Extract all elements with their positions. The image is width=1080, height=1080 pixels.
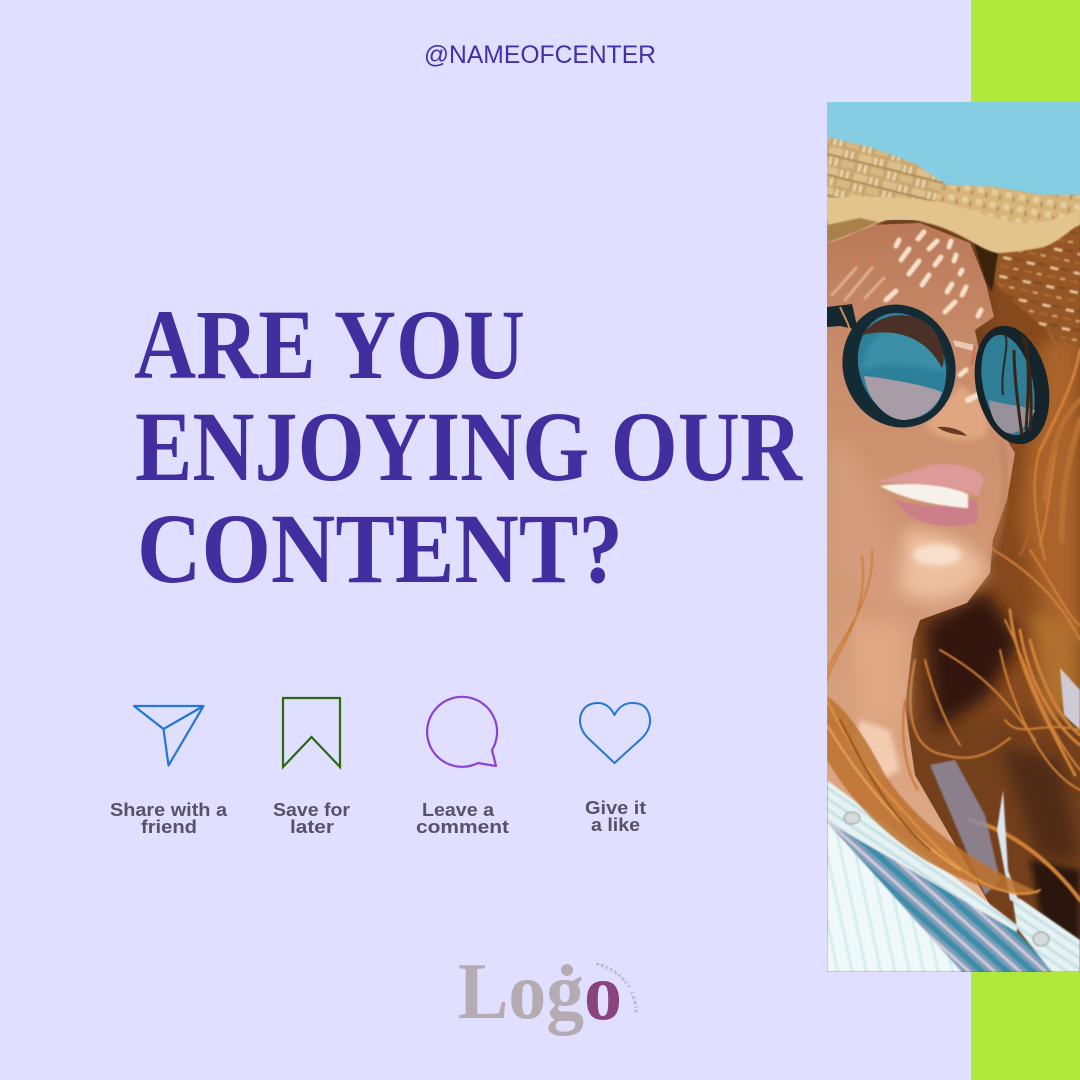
- sunglasses: [827, 304, 1050, 444]
- label: save for later: [273, 800, 350, 837]
- hair mass: [827, 220, 1080, 972]
- icon: comment bubble: [427, 697, 497, 767]
- headline: CONTENT?: [137, 493, 623, 604]
- hair strands: [910, 290, 1080, 900]
- label: give it a like: Give it: [585, 798, 646, 818]
- label: save for later: Save for: [273, 800, 350, 820]
- label: leave a comment: Leave a: [422, 800, 495, 820]
- sky: [827, 102, 1080, 222]
- bottom green accent block: [971, 972, 1080, 1080]
- icon: save bookmark: [283, 698, 340, 767]
- headline: ENJOYING OUR: [135, 391, 804, 502]
- straw hat: [827, 137, 1080, 345]
- label: give it a like: a like: [591, 815, 640, 835]
- striped shirt: [827, 760, 1080, 972]
- headline: ARE YOU: [134, 289, 525, 400]
- label: save for later: later: [290, 817, 334, 837]
- loose strands over neck and shirt: [827, 550, 1040, 894]
- label: share with a friend: Share with a: [110, 800, 228, 820]
- label: share with a friend: friend: [141, 817, 197, 837]
- dappled sunlight on forehead: [832, 232, 981, 400]
- logo: Log: [458, 948, 584, 1036]
- label: share with a friend: [110, 800, 228, 837]
- headline: [134, 289, 804, 604]
- label: leave a comment: comment: [416, 817, 509, 837]
- photo: smiling woman in straw hat and sunglasses: [827, 102, 1080, 972]
- logo: o: [584, 949, 622, 1037]
- icon: heart: [580, 703, 650, 763]
- icon: share paper plane: [134, 706, 204, 766]
- logo: PREGNANCY CENTER: [596, 962, 638, 1013]
- top green accent block: [971, 0, 1080, 102]
- label: leave a comment: [416, 800, 509, 837]
- lips and teeth: [872, 464, 984, 526]
- label: give it a like: [585, 798, 646, 835]
- face and neck skin: [827, 223, 1015, 930]
- handle text: @NAMEOFCENTER: [424, 41, 656, 69]
